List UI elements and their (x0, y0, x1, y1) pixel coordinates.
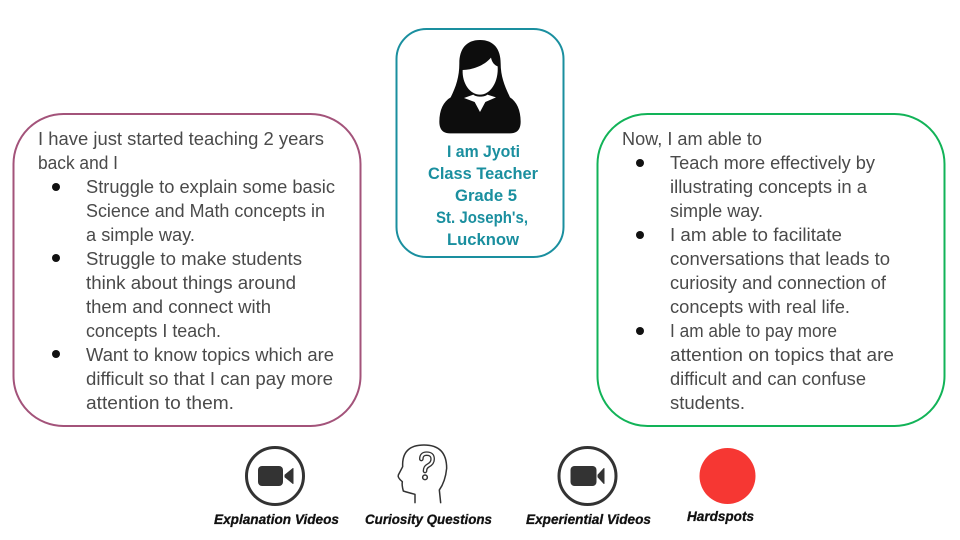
challenge item 3 (52, 345, 334, 413)
outcome item 1 (636, 153, 875, 221)
outcome item 3 (636, 321, 894, 413)
icon: teacher avatar (439, 40, 521, 133)
outcomes panel frame (598, 114, 944, 426)
challenge item 2: Struggle to make students (86, 249, 302, 269)
outcome item 3: attention on topics that are (670, 345, 894, 365)
outcome item 2: conversations that leads to (670, 249, 890, 269)
label: Curiosity Questions (365, 511, 492, 527)
challenge item 1: a simple way. (86, 225, 195, 245)
label: Explanation Videos (214, 511, 339, 527)
legend: hardspots (687, 448, 756, 524)
challenges intro: back and I (38, 153, 118, 173)
challenge item 1 (52, 177, 335, 245)
profile card frame (396, 29, 564, 257)
legend: curiosity questions (365, 445, 492, 527)
label: Experiential Videos (526, 511, 651, 527)
outcome item 2: curiosity and connection of (670, 273, 887, 293)
profile text: St. Joseph's, (436, 208, 528, 227)
panel: teacher profile (396, 29, 564, 257)
challenge item 2: concepts I teach. (86, 321, 221, 341)
challenge item 3: Want to know topics which are (86, 345, 334, 365)
outcome item 3: I am able to pay more (670, 321, 837, 341)
outcome item 3: difficult and can confuse (670, 369, 866, 389)
challenge item 3: difficult so that I can pay more (86, 369, 333, 389)
icon: video camera in circle (246, 448, 304, 504)
challenges intro: I have just started teaching 2 years (38, 129, 324, 149)
legend: experiential videos (526, 448, 651, 527)
outcomes intro: Now, I am able to (622, 129, 762, 149)
icon: video camera in circle (559, 448, 616, 504)
icon: red circle (700, 448, 756, 504)
profile text: I am Jyoti (447, 142, 520, 161)
outcome item 1: illustrating concepts in a (670, 177, 868, 197)
icon: head with question mark (398, 445, 447, 503)
outcome item 1: simple way. (670, 201, 763, 221)
panel: challenges before (14, 114, 360, 426)
challenge item 1: Science and Math concepts in (86, 201, 325, 221)
outcome item 2: concepts with real life. (670, 297, 850, 317)
legend: explanation videos (214, 448, 339, 527)
panel: outcomes now (598, 114, 944, 426)
profile text (428, 142, 538, 249)
challenge item 3: attention to them. (86, 393, 234, 413)
outcome item 3: students. (670, 393, 745, 413)
challenge item 2: them and connect with (86, 297, 271, 317)
outcome item 1: Teach more effectively by (670, 153, 875, 173)
outcome item 2: I am able to facilitate (670, 225, 842, 245)
profile text: Lucknow (447, 230, 520, 249)
challenge item 1: Struggle to explain some basic (86, 177, 335, 197)
label: Hardspots (687, 508, 754, 524)
challenges intro (38, 129, 324, 173)
outcome item 2 (636, 225, 890, 317)
challenge item 2: think about things around (86, 273, 296, 293)
challenges panel frame (14, 114, 360, 426)
profile text: Grade 5 (455, 186, 517, 205)
challenge item 2 (52, 249, 302, 341)
profile text: Class Teacher (428, 164, 538, 183)
